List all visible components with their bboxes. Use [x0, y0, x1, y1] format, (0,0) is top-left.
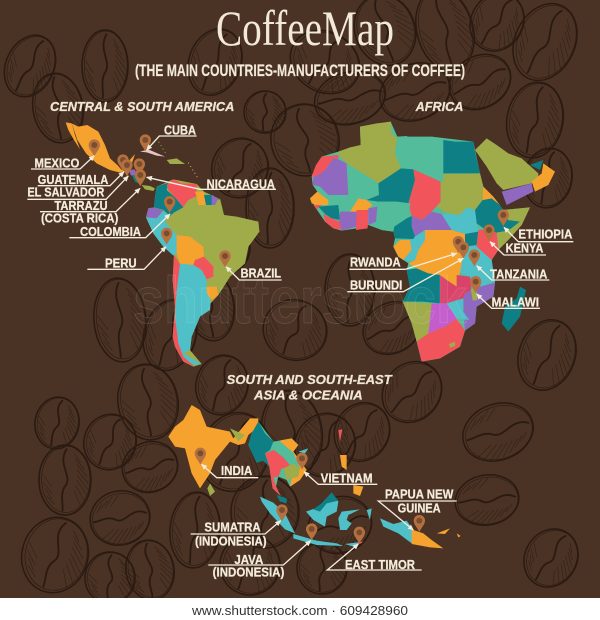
pins: America — [89, 134, 231, 267]
heading: South and South-East Asia and Oceania: ASIA & OCEANIA — [253, 387, 363, 402]
label: Tarrazu (Costa Rica): (COSTA RICA) — [41, 211, 118, 226]
label: Nicaragua — [147, 176, 276, 191]
footer bar — [0, 598, 600, 620]
label: Cuba — [147, 122, 197, 150]
label: East Timor — [327, 544, 422, 572]
footer bar: www.shutterstock.com · 609428960 — [191, 603, 408, 618]
label: Java (Indonesia): (INDONESIA) — [213, 565, 284, 580]
watermark: shutterstock — [133, 263, 467, 337]
label: Kenya — [490, 241, 546, 256]
label: Brazil — [226, 266, 282, 281]
label: El Salvador — [27, 176, 128, 200]
label: Java (Indonesia): JAVA — [234, 552, 264, 567]
label: Java (Indonesia) — [208, 541, 311, 580]
label: Peru — [87, 247, 166, 271]
label: Papua New Guinea: PAPUA NEW — [385, 486, 454, 501]
heading: Africa: AFRICA — [415, 99, 463, 114]
label: Burundi — [347, 258, 463, 292]
label: Rwanda: RWANDA — [350, 255, 401, 270]
label: Sumatra (Indonesia): (INDONESIA) — [195, 534, 267, 549]
label: Kenya: KENYA — [506, 241, 544, 256]
label: Papua New Guinea: GUINEA — [398, 501, 441, 516]
label: Malawi — [477, 294, 540, 310]
map: Asia and Oceania — [168, 405, 461, 548]
label: Burundi: BURUNDI — [350, 277, 402, 292]
label: Peru: PERU — [105, 256, 137, 271]
panel: Central and South America — [27, 99, 282, 367]
heading: South and South-East Asia and Oceania: SOUTH AND SOUTH-EAST — [227, 372, 393, 387]
label: Malawi: MALAWI — [492, 295, 539, 310]
label: Sumatra (Indonesia): SUMATRA — [204, 519, 261, 534]
map: Africa — [310, 122, 555, 362]
label: Papua New Guinea — [378, 486, 457, 530]
panel: South and South-East Asia and Oceania — [168, 372, 461, 580]
label: Tarrazu (Costa Rica): TARRAZU — [54, 198, 108, 213]
label: Colombia: COLOMBIA — [80, 224, 142, 239]
label: Brazil: BRAZIL — [241, 266, 281, 281]
label: Colombia — [69, 214, 170, 239]
label: India: INDIA — [221, 463, 253, 478]
panel: Africa — [310, 99, 573, 362]
label: Vietnam: VIETNAM — [321, 470, 373, 485]
label: El Salvador: EL SALVADOR — [27, 185, 105, 200]
title: CoffeeMap — [216, 0, 394, 56]
map: Central and South America — [66, 122, 259, 367]
label: Sumatra (Indonesia) — [191, 519, 281, 549]
pins: Asia — [195, 448, 425, 544]
label: Rwanda — [349, 253, 457, 270]
label: Mexico: MEXICO — [34, 155, 79, 170]
label: Guatemala: GUATEMALA — [38, 172, 109, 187]
label: Ethiopia: ETHIOPIA — [518, 226, 573, 241]
label: Nicaragua: NICARAGUA — [207, 176, 276, 191]
label: Tarrazu (Costa Rica) — [40, 188, 140, 226]
heading: Central and South America: CENTRAL & SOUTH AMERICA — [50, 99, 234, 114]
label: Cuba: CUBA — [164, 122, 197, 137]
subtitle: (THE MAIN COUNTRIES-MANUFACTURERS OF COFFEE) — [135, 61, 465, 80]
label: India — [202, 463, 258, 478]
label: Tanzania: TANZANIA — [490, 266, 548, 281]
heading: South and South-East Asia and Oceania — [227, 372, 393, 402]
pins: Africa — [453, 209, 509, 293]
label: East Timor: EAST TIMOR — [345, 557, 416, 572]
